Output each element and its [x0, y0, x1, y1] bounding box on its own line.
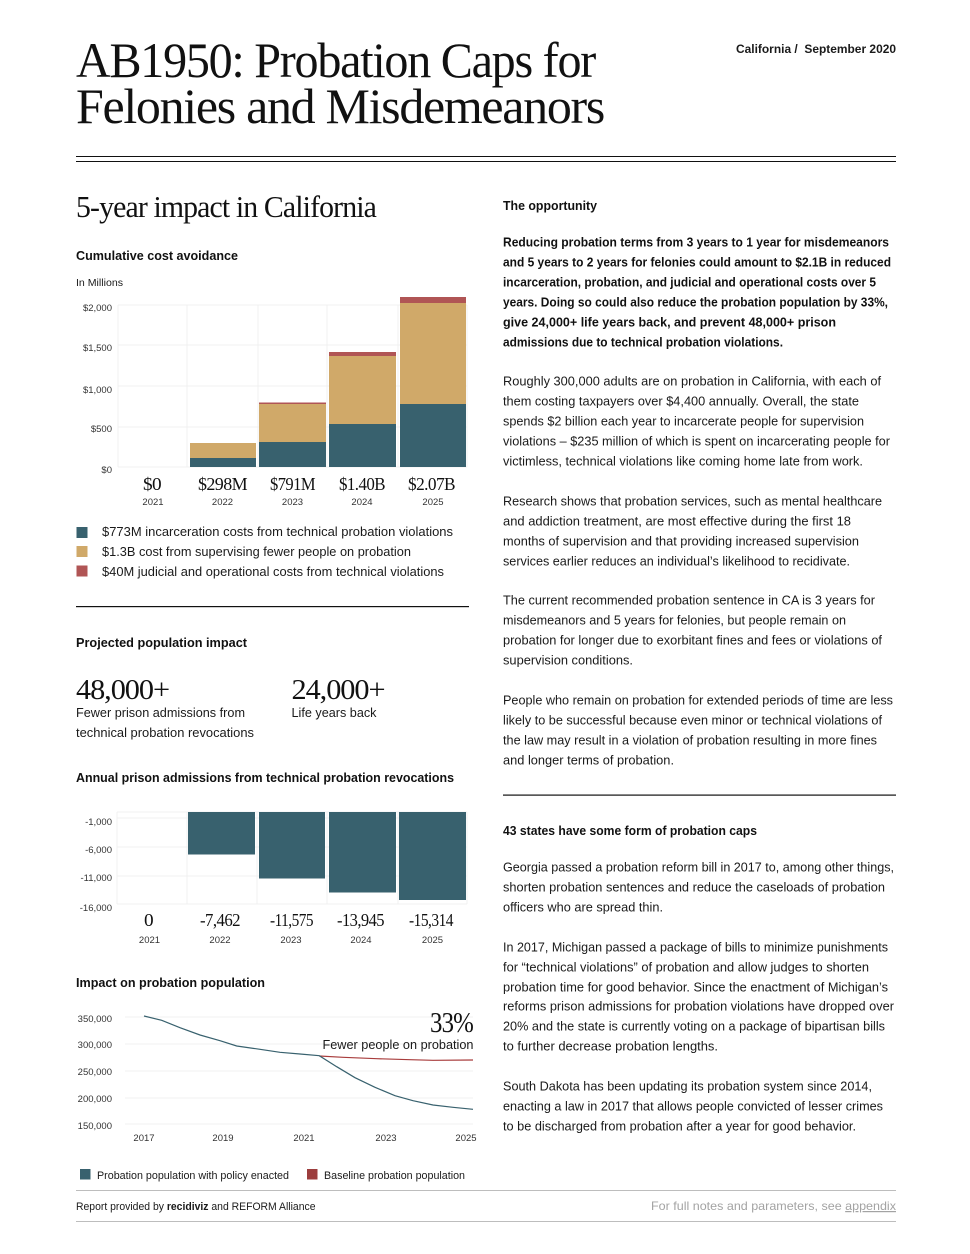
paragraph: research: Research shows that probation services, such as mental healthcare [503, 494, 882, 508]
title [76, 32, 604, 134]
line chart heading: Impact on probation population [76, 975, 265, 990]
stat: admissions [76, 674, 254, 740]
panel: state probation caps [503, 823, 895, 1134]
bold summary: years. Doing so could also reduce the probation population by 33%, [503, 294, 888, 310]
line chart: 2019 [212, 1133, 234, 1144]
line chart: 350,000 [78, 1014, 112, 1025]
opportunity heading: The opportunity [503, 198, 598, 213]
callout: 33%: 33% [430, 1007, 474, 1039]
paragraph: research [503, 494, 882, 568]
bold summary [503, 234, 891, 350]
line chart: 2021 [293, 1133, 315, 1144]
stacked bar chart: $2,000 [83, 303, 112, 314]
paragraph: Georgia [503, 860, 894, 914]
line chart: 2017 [133, 1133, 155, 1144]
footer [76, 1190, 896, 1222]
negative bar chart: -6,000 [85, 845, 112, 856]
bold summary: and 5 years to 2 years for felonies could amount to $2.1B in reduced [503, 254, 891, 270]
paragraph: South Dakota [503, 1078, 883, 1134]
negative bar chart: 2023 [280, 935, 302, 946]
paragraph: Michigan: probation time for good behavior. Since the enactment of Michigan’s [503, 980, 888, 994]
paragraph: extended periods [503, 692, 893, 768]
stat: admissions: technical probation revocations [76, 725, 254, 740]
cost legend [76, 524, 453, 579]
paragraph: costs: Roughly 300,000 adults are on probation in California, with each of [503, 374, 881, 388]
paragraph: Michigan: 20% and the state is currently voting on a package of bipartisan bills [503, 1018, 885, 1034]
stat: life years [292, 674, 384, 720]
negative bar chart: 2021 [139, 935, 160, 946]
paragraph: South Dakota: South Dakota has been updating its probation system since 2014, [503, 1078, 872, 1094]
negative bar chart: 2024 [350, 935, 372, 946]
stacked bar chart: 2021 [142, 497, 164, 508]
date and location: California / September 2020 [736, 42, 896, 56]
negative bar chart: -11,575 [270, 910, 313, 930]
stat: life years: 24,000+ [292, 674, 384, 706]
paragraph: Michigan: reforms prison admissions for probation violations have dropped over [503, 998, 895, 1014]
line chart legend [80, 1169, 465, 1182]
callout: 33%: Fewer people on probation [322, 1037, 474, 1052]
paragraph: South Dakota: to be discharged from probation after a year for good behavior. [503, 1118, 856, 1134]
stacked bar chart: $1.40B [339, 474, 386, 494]
paragraph: extended periods: and longer terms of probation. [503, 752, 674, 768]
paragraph: current sentence: probation for longer due to exorbitant fines and fees or violations of [503, 632, 882, 648]
callout: 33% [322, 1007, 474, 1052]
stacked bar chart: $791M [270, 474, 316, 494]
paragraph: Michigan [503, 940, 895, 1054]
population heading: Projected population impact [76, 635, 248, 650]
stacked bar chart: 2025 [422, 497, 444, 508]
paragraph: costs: victimless, technical violations like coming home late from work. [503, 454, 863, 468]
stat: admissions: Fewer prison admissions from [76, 705, 245, 720]
section heading: 5-year impact in California [76, 189, 377, 224]
paragraph: extended periods: People who remain on probation for extended periods of time are less [503, 692, 893, 708]
stacked bar chart: $1,500 [83, 343, 112, 354]
negative bar chart: -7,462 [200, 910, 240, 930]
negative bar chart: 2025 [422, 935, 443, 946]
paragraph: current sentence: The current recommended probation sentence in CA is 3 years for [503, 592, 876, 608]
stacked bar chart: 2023 [282, 497, 303, 508]
line chart: 200,000 [78, 1094, 112, 1105]
header [76, 32, 896, 134]
stacked bar chart: 2024 [351, 497, 373, 508]
unit note: In Millions [76, 277, 123, 289]
paragraph: current sentence: supervision conditions. [503, 652, 633, 668]
stat: life years: Life years back [292, 705, 377, 720]
paragraph: extended periods: likely to be successful because even minor or technical violations of [503, 712, 882, 728]
panel: the opportunity [503, 198, 893, 768]
paragraph: research: and addiction treatment, are most effective during the first 18 [503, 514, 851, 528]
negative bar chart: -11,000 [80, 873, 112, 884]
stacked bar chart: 2022 [212, 497, 233, 508]
report credit: Report provided by recidiviz and REFORM Alliance [76, 1201, 316, 1213]
panel: 5-year impact [76, 189, 467, 579]
stat: admissions: 48,000+ [76, 674, 169, 706]
paragraph: costs: violations – $235 million of which is spent on incarcerating people for [503, 434, 891, 448]
line chart legend: Probation population with policy enacted [97, 1170, 289, 1182]
title: Felonies and Misdemeanors [76, 78, 604, 134]
paragraph: South Dakota: enacting a law in 2017 that allows people convicted of lesser crimes [503, 1098, 883, 1114]
panel: impact on probation population [76, 975, 477, 1182]
stacked bar chart: $2.07B [408, 474, 456, 494]
appendix note: For full notes and parameters, see appendix [651, 1199, 896, 1213]
line chart: 150,000 [78, 1121, 112, 1132]
paragraph: Michigan: for “technical violations” of probation and allow judges to shorten [503, 960, 869, 974]
line chart: 300,000 [78, 1040, 112, 1051]
negative bar chart [80, 812, 467, 946]
paragraph: costs: them costing taxpayers over $4,400 annually. Overall, the state [503, 394, 859, 408]
panel: projected population impact [76, 635, 467, 946]
annual admissions heading: Annual prison admissions from technical probation revocations [76, 770, 454, 785]
paragraph: Michigan: In 2017, Michigan passed a package of bills to minimize punishments [503, 940, 888, 954]
title: AB1950: Probation Caps for [76, 32, 597, 88]
cost legend: $773M incarceration costs from technical probation violations [102, 524, 453, 539]
line chart legend: Baseline probation population [324, 1170, 465, 1182]
bold summary: admissions due to technical probation violations. [503, 334, 783, 350]
paragraph: Georgia: shorten probation sentences and reduce the caseloads of probation [503, 880, 885, 894]
stacked bar chart: $298M [198, 474, 248, 494]
bold summary: incarceration, probation, and judicial and operational costs over 5 [503, 274, 876, 290]
paragraph: Georgia: officers who are spread thin. [503, 900, 663, 914]
cost avoidance heading: Cumulative cost avoidance [76, 248, 238, 263]
stacked bar chart: $500 [91, 424, 112, 435]
negative bar chart: -1,000 [85, 817, 112, 828]
caps heading: 43 states have some form of probation caps [503, 823, 757, 838]
paragraph: current sentence [503, 592, 882, 668]
bold summary: Reducing probation terms from 3 years to 1 year for misdemeanors [503, 234, 889, 250]
paragraph: Georgia: Georgia passed a probation reform bill in 2017 to, among other things, [503, 860, 894, 874]
stacked bar chart: $0 [143, 474, 162, 494]
cost legend: $40M judicial and operational costs from technical violations [102, 564, 444, 579]
paragraph: costs: spends $2 billion each year to incarcerate people for supervision [503, 414, 864, 428]
cost legend: $1.3B cost from supervising fewer people on probation [102, 544, 411, 559]
bold summary: give 24,000+ life years back, and prevent 48,000+ prison [503, 314, 836, 330]
negative bar chart: -15,314 [409, 910, 454, 930]
stacked bar chart: $0 [101, 465, 112, 476]
stacked bar chart: $1,000 [83, 385, 112, 396]
negative bar chart: 2022 [209, 935, 231, 946]
negative bar chart: -13,945 [337, 910, 385, 930]
paragraph: current sentence: misdemeanors and 5 years for felonies, but people remain on [503, 612, 846, 628]
paragraph: extended periods: the law may result in a violation of probation resulting in more fines [503, 732, 877, 748]
paragraph: research: services earlier reduces an individual’s likelihood to recidivate. [503, 554, 850, 568]
paragraph: costs [503, 374, 891, 468]
line chart: 2025 [455, 1133, 477, 1144]
negative bar chart: 0 [144, 910, 154, 930]
negative bar chart: -16,000 [80, 903, 112, 914]
paragraph: Michigan: to further decrease probation lengths. [503, 1038, 718, 1054]
line chart: 250,000 [78, 1067, 112, 1078]
line chart: 2023 [375, 1133, 397, 1144]
paragraph: research: months of supervision and that providing increased supervision [503, 534, 859, 548]
stacked bar chart [83, 297, 467, 508]
line chart [78, 1007, 477, 1144]
